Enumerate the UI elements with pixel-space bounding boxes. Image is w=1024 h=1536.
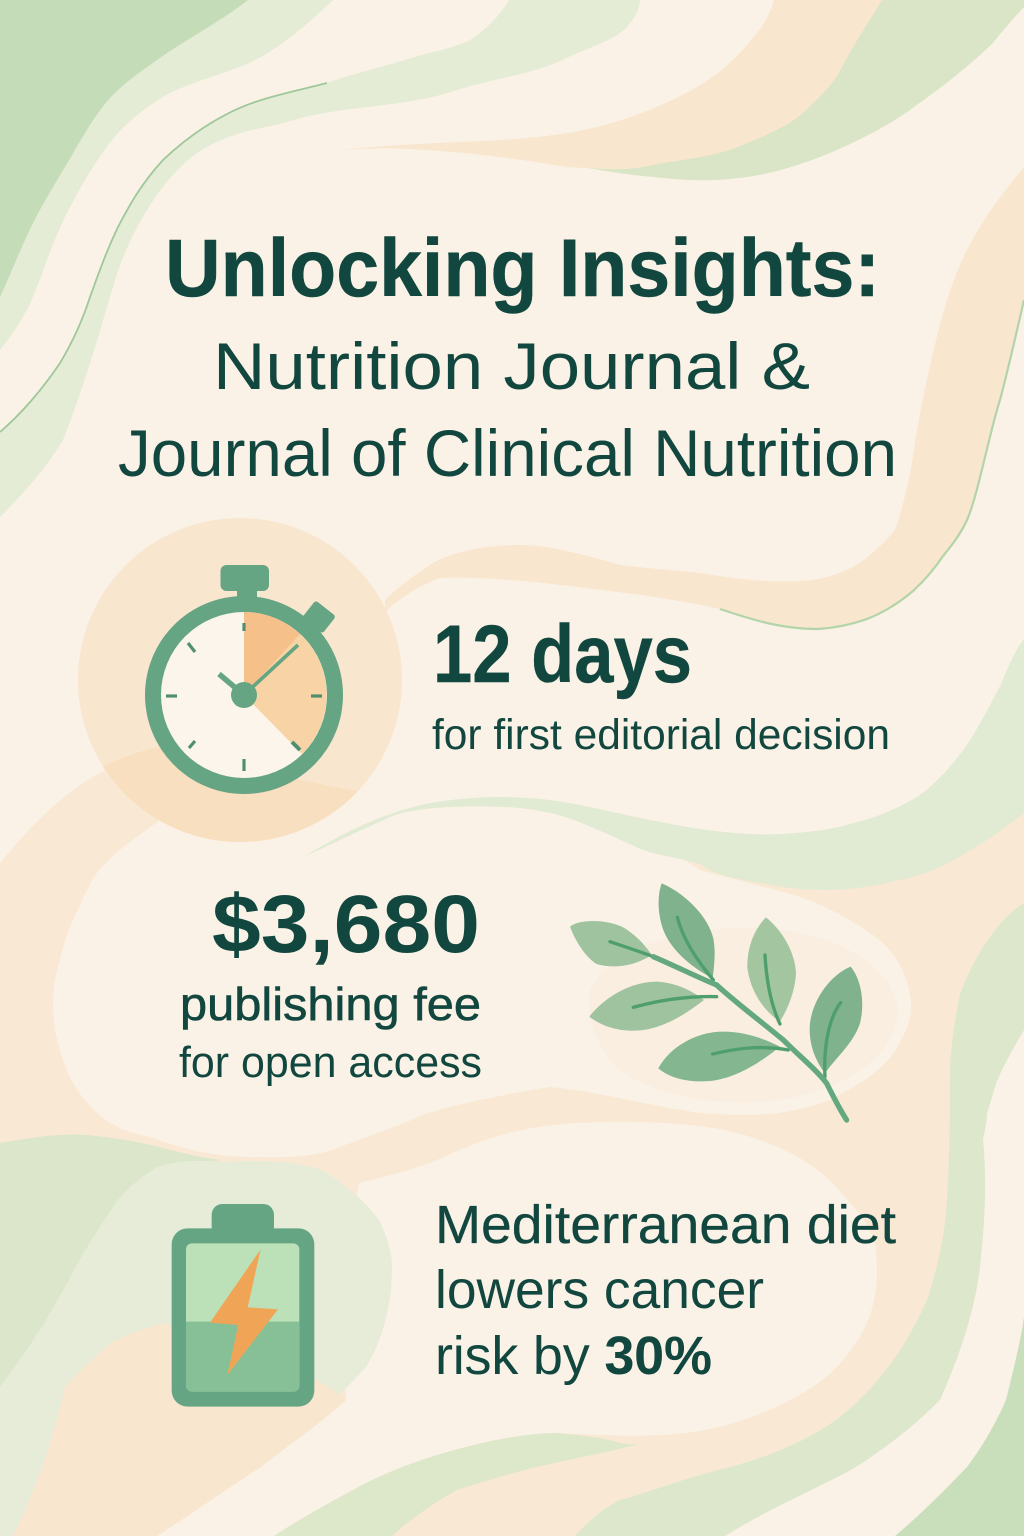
icon: leaf branch <box>570 883 862 1120</box>
heading line: Nutrition Journal: Nutrition Journal & <box>213 329 810 403</box>
stat: 12 days: 12 days <box>433 609 692 700</box>
text: lowers cancer: lowers cancer <box>435 1260 764 1320</box>
caption: publishing fee: publishing fee <box>180 978 481 1030</box>
icon backdrop circle <box>78 518 402 842</box>
icon: stopwatch <box>145 565 343 794</box>
text: risk by 30%: risk by 30% <box>435 1326 712 1386</box>
panel: Mediterranean diet <box>172 1195 896 1407</box>
panel: editorial decision time <box>60 518 890 860</box>
icon: battery with lightning bolt <box>172 1204 314 1407</box>
caption: first editorial decision: for first editorial decision <box>432 711 890 759</box>
heading line: Journal of Clinical Nutrition: Journal of Clinical Nutrition <box>118 416 897 490</box>
heading line: Unlocking Insights: Unlocking Insights: <box>165 223 880 314</box>
title <box>118 223 897 490</box>
panel: publishing fee <box>179 879 862 1120</box>
caption: for open access: for open access <box>179 1038 482 1087</box>
stat: $3,680: $3,680 <box>212 879 480 970</box>
text: Mediterranean diet: Mediterranean diet <box>435 1195 896 1255</box>
